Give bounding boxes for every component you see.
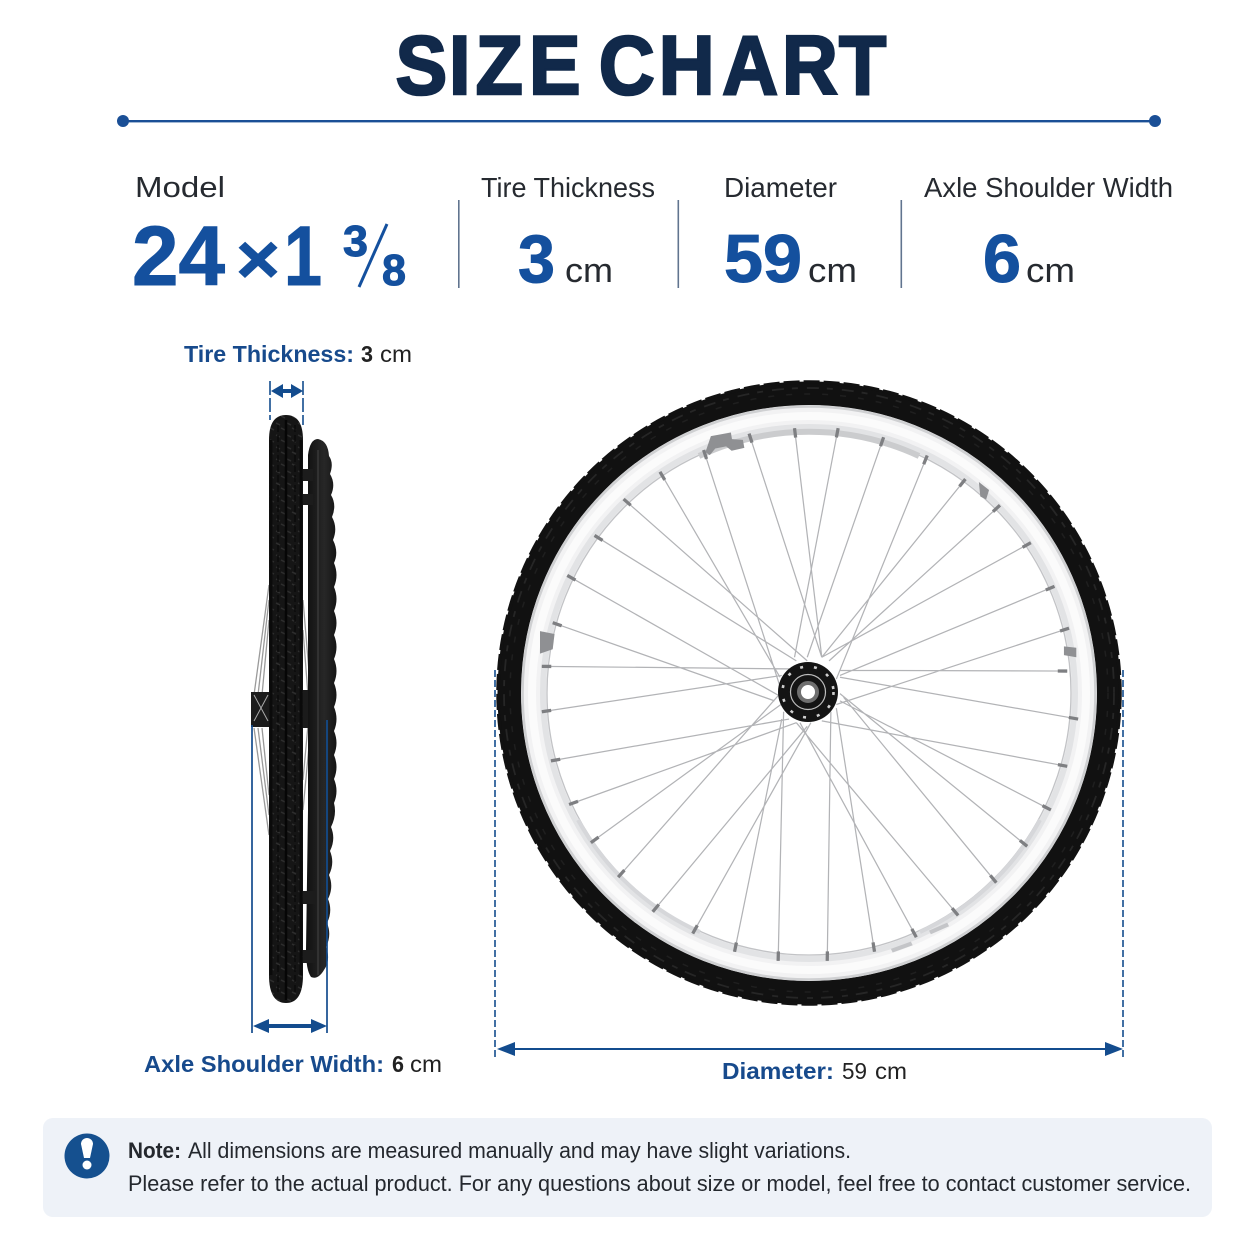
spec: diameter: cm [808,252,857,290]
spec: axle shoulder width [924,172,1173,297]
connectors [301,469,315,963]
spec: model: 24 [132,209,225,303]
arrow: axle shoulder width [252,720,327,1033]
hub [778,662,838,722]
note text [128,1138,1191,1196]
label: tire thickness: 3 [361,341,373,367]
front tire [269,415,303,1003]
label: tire thickness: cm [380,341,412,367]
spec: axle shoulder width: cm [1026,252,1075,290]
label: axle shoulder width: 6 [392,1051,404,1077]
label: diameter: cm [875,1058,907,1084]
arrow: tire thickness [270,381,303,425]
side hub [251,690,315,728]
note text: Please refer to the actual product. For any questions about size or model, feel free to contact customer service. [128,1171,1191,1196]
label: tire thickness: Tire Thickness: [184,341,354,367]
spec: tire thickness: 3 [518,221,555,297]
side spokes [254,585,311,835]
spec: model: 3 [343,217,368,266]
spec: model [132,172,406,303]
label: diameter: 59 [842,1058,867,1084]
note text: Note: [128,1138,181,1163]
spec: diameter: 59 [724,221,802,297]
side view wheel [251,415,336,1003]
title: SIZE CHART [396,19,886,113]
tire [498,382,1120,1004]
label: axle shoulder width: Axle Shoulder Width: [144,1051,384,1077]
spec: tire thickness: cm [565,252,613,290]
title rule [117,115,1161,127]
spec: axle shoulder width: Axle Shoulder Width [924,172,1173,203]
label: axle shoulder width: cm [410,1051,442,1077]
note panel [43,1118,1212,1217]
divider [900,200,902,288]
spec: model: Model [135,172,225,204]
spec: model: 1 [284,209,322,303]
spokes and nipples [540,428,1078,961]
icon: exclamation [64,1134,110,1178]
note text: All dimensions are measured manually and may have slight variations. [188,1138,851,1163]
divider [458,200,460,288]
label: diameter: Diameter: [722,1058,834,1084]
spec: tire thickness: Tire Thickness [481,172,655,203]
spec: diameter [724,172,857,297]
spec: model: 8 [382,246,406,295]
divider [678,200,679,288]
arrow: diameter [495,670,1123,1057]
spec: diameter: Diameter [724,172,837,203]
label: diameter [722,1058,907,1084]
rim clips [540,433,1076,657]
front view wheel [498,382,1120,1004]
spec: tire thickness [481,172,655,297]
rim [522,406,1096,980]
rear tire with scalloped edge [306,439,336,978]
spec: axle shoulder width: 6 [983,221,1021,297]
spec: model: × [236,220,280,298]
